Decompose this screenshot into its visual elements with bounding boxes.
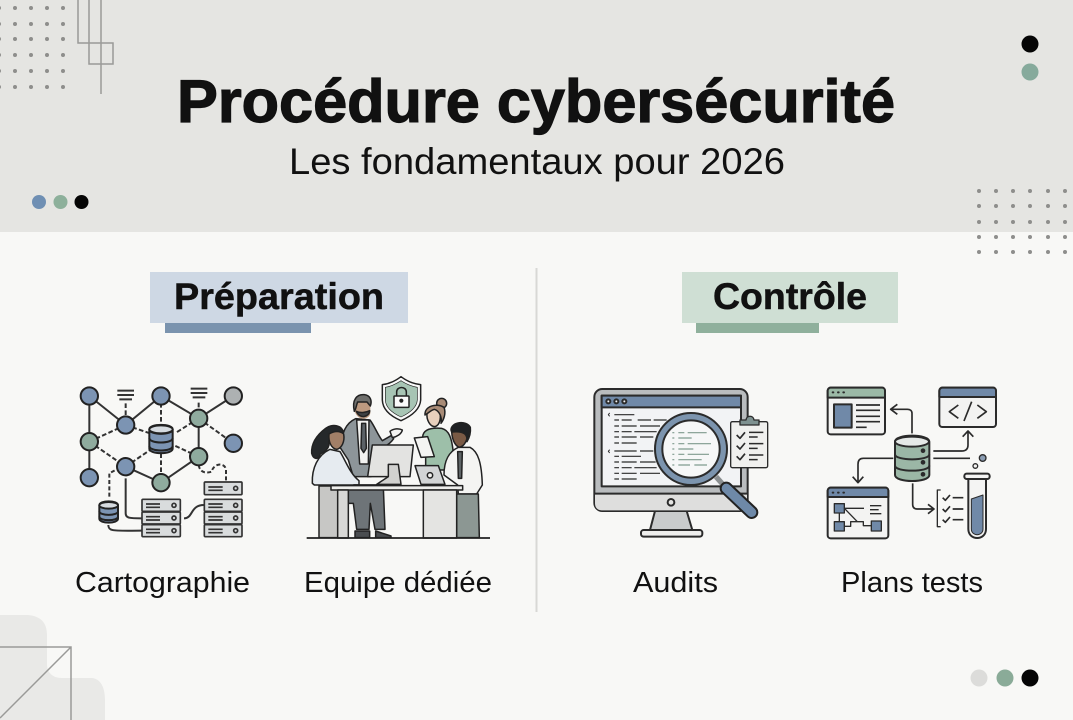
decoration: right dot grid xyxy=(977,189,1067,254)
icon: network map xyxy=(81,387,242,537)
decoration: bottom-left lines xyxy=(0,647,71,720)
database xyxy=(895,436,929,481)
subtitle: Les fondamentaux pour 2026 xyxy=(289,141,785,182)
title: Procédure cybersécurité xyxy=(177,68,895,135)
icon: shield xyxy=(382,377,421,421)
arrows xyxy=(853,404,973,514)
decoration: top-left line squares xyxy=(78,0,113,94)
label: Plans tests: Plans tests xyxy=(841,567,983,599)
figure: monitor xyxy=(353,445,413,485)
magnifier xyxy=(655,413,752,512)
checklist xyxy=(937,490,963,527)
decoration: top-left dot grid xyxy=(0,6,65,89)
heading: Préparation xyxy=(150,272,408,333)
heading: Contrôle: Contrôle xyxy=(713,275,867,317)
figure: man right xyxy=(444,423,482,538)
desk xyxy=(307,486,490,538)
test tube xyxy=(964,455,990,538)
decoration: bottom-right dots xyxy=(970,670,1038,686)
figure: man in suit xyxy=(340,395,402,477)
window: diagram xyxy=(828,488,888,538)
label: Cartographie: Cartographie xyxy=(75,567,250,599)
heading: Préparation: Préparation xyxy=(174,275,384,317)
code lines xyxy=(614,415,667,479)
header band xyxy=(0,0,1073,232)
decoration: bottom-left blob xyxy=(0,615,105,720)
figure: woman with tablet xyxy=(414,398,453,470)
decoration: left header dots xyxy=(32,195,88,209)
label: Audits: Audits xyxy=(633,567,718,599)
clipboard xyxy=(731,416,768,468)
icon: test plans xyxy=(828,388,996,538)
label: Equipe dédiée: Equipe dédiée xyxy=(304,567,492,599)
decoration: right header dots xyxy=(1022,36,1038,80)
figure: seated legs xyxy=(345,487,385,529)
window: code xyxy=(939,388,996,427)
figure: woman left xyxy=(312,426,359,538)
icon: dedicated team xyxy=(307,377,490,538)
window: document xyxy=(828,388,885,434)
heading: Contrôle xyxy=(682,272,898,333)
icon: audit monitor xyxy=(594,389,768,537)
figure: laptop xyxy=(415,466,445,484)
